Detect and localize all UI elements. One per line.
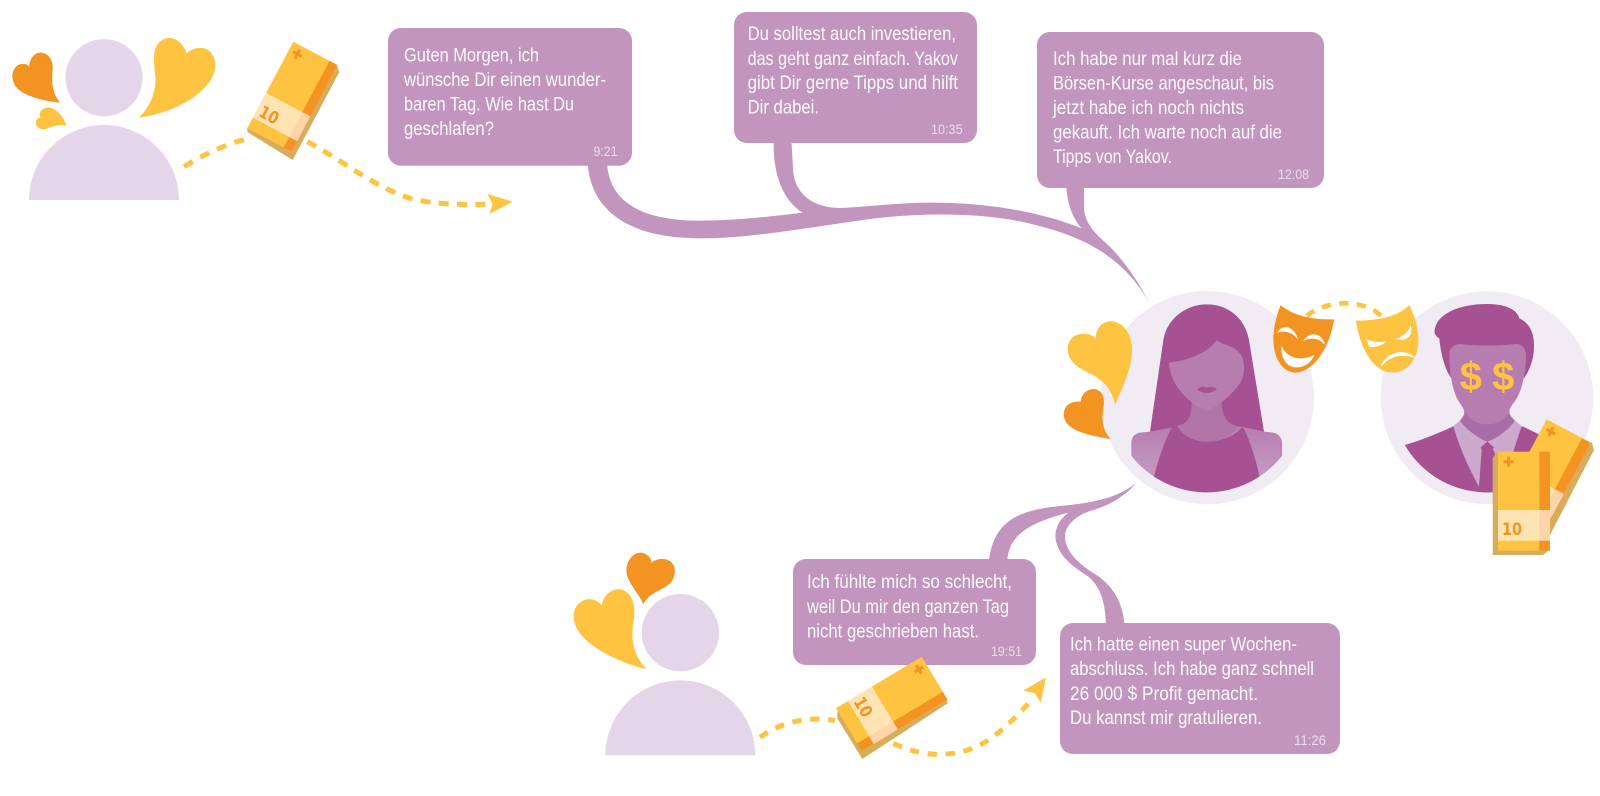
- icon: banknote stack held by man, back: [1501, 419, 1594, 535]
- portrait: woman: [1101, 291, 1314, 504]
- icon: theatre masks: [1273, 303, 1418, 373]
- arrow: dashed money path bottom: [760, 677, 1046, 754]
- arrow: dashed money path top: [184, 139, 513, 214]
- connector: top message branches: [588, 142, 1149, 302]
- icon: orange heart: [626, 553, 675, 604]
- message text: abschluss. Ich habe ganz schnell: [1070, 658, 1314, 680]
- icon: banknote stack held by man, front: 10: [1502, 520, 1522, 540]
- message text: Ich hatte einen super Wochen-: [1070, 634, 1297, 656]
- panel: message 10:35: [734, 12, 977, 143]
- message text: [1052, 48, 1282, 168]
- icon: banknote stack bottom: 10: [849, 694, 876, 721]
- message text: [1070, 634, 1314, 729]
- background circle: [1101, 291, 1314, 504]
- panel: message 12:08: [1037, 32, 1324, 188]
- icon: person body: [605, 680, 755, 755]
- message text: Ich habe nur mal kurz die: [1053, 48, 1242, 70]
- message text: weil Du mir den ganzen Tag: [806, 596, 1009, 618]
- message text: [403, 45, 606, 140]
- dashed arc between masks: [1307, 303, 1382, 316]
- icon: person head: [65, 39, 143, 116]
- panel: message 19:51: [793, 559, 1036, 665]
- icon: banknote stack top: 10: [255, 102, 282, 129]
- timestamp: 9:21: [594, 143, 618, 159]
- message text: [806, 571, 1012, 643]
- icon: hearts beside woman: [1064, 321, 1132, 439]
- icon: banknote stack held by man, front: [1493, 452, 1550, 555]
- timestamp: 12:08: [1278, 166, 1309, 182]
- message text: Börsen-Kurse angeschaut, bis: [1053, 72, 1274, 94]
- connector: bottom message branches: [989, 483, 1136, 625]
- message text: [748, 23, 958, 119]
- message text: Tipps von Yakov.: [1053, 146, 1172, 168]
- timestamp: 10:35: [931, 121, 963, 137]
- message text: wünsche Dir einen wunder-: [403, 69, 606, 91]
- icon: dollar eyes: [1460, 355, 1514, 399]
- sad mask: [1356, 305, 1418, 373]
- message text: Du kannst mir gratulieren.: [1070, 707, 1262, 729]
- message text: 26 000 $ Profit gemacht.: [1070, 683, 1258, 705]
- man figure: [1405, 304, 1538, 492]
- timestamp: 19:51: [991, 643, 1022, 659]
- icon: banknote stack top: [247, 42, 339, 160]
- portrait: man: [1381, 291, 1593, 523]
- message text: das geht ganz einfach. Yakov: [748, 48, 958, 70]
- message text: baren Tag. Wie hast Du: [404, 94, 574, 116]
- icon: person head: [642, 594, 719, 671]
- icon: dollar eyes: $: [1492, 355, 1514, 399]
- panel: message 11:26: [1060, 623, 1340, 754]
- message text: Ich fühlte mich so schlecht,: [807, 571, 1012, 593]
- icon: person body: [29, 125, 179, 200]
- message text: Guten Morgen, ich: [404, 45, 539, 67]
- message text: Dir dabei.: [748, 97, 819, 119]
- timestamp: 11:26: [1294, 732, 1326, 748]
- icon: yellow heart: [574, 589, 647, 669]
- message text: gibt Dir gerne Tipps und hilft: [748, 72, 958, 94]
- message text: jetzt habe ich noch nichts: [1052, 97, 1244, 119]
- happy mask: [1273, 305, 1334, 373]
- message text: nicht geschrieben hast.: [807, 621, 979, 643]
- icon: dollar eyes: $: [1460, 355, 1482, 399]
- message text: geschlafen?: [404, 118, 494, 140]
- person: sender top left with hearts: [12, 38, 215, 200]
- person: sender bottom with hearts: [574, 553, 755, 755]
- icon: hearts: [12, 38, 215, 129]
- message text: Du solltest auch investieren,: [748, 23, 956, 45]
- message text: gekauft. Ich warte noch auf die: [1053, 122, 1282, 144]
- icon: banknote stack bottom: [836, 657, 948, 759]
- woman figure: [1131, 304, 1282, 497]
- panel: message 9:21: [388, 28, 632, 166]
- background circle: [1381, 291, 1593, 504]
